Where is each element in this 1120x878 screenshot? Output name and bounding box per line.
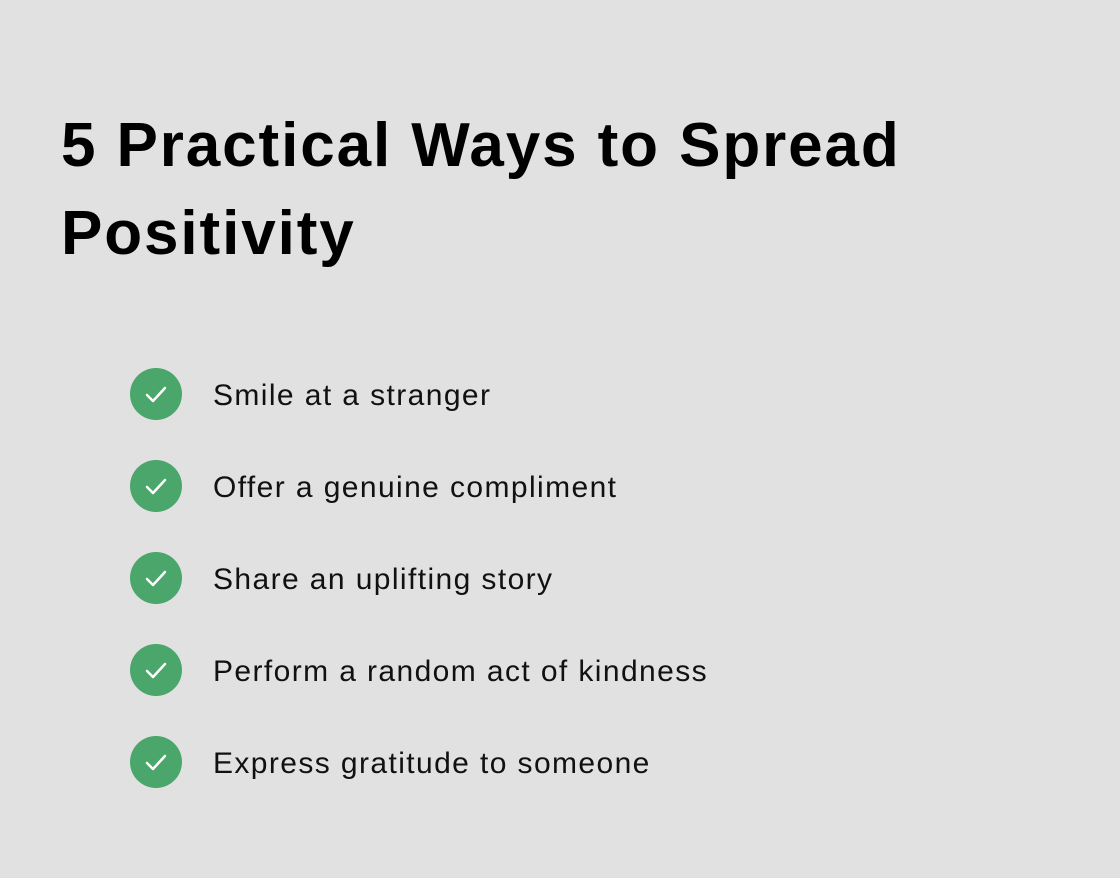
item: smile: Smile at a stranger	[213, 379, 491, 412]
icon: check	[130, 644, 182, 696]
item: compliment	[130, 460, 617, 512]
item: kindness: Perform a random act of kindness	[213, 655, 708, 688]
item: kindness	[130, 644, 708, 696]
item: smile	[130, 368, 491, 420]
icon: check	[130, 368, 182, 420]
item: gratitude: Express gratitude to someone	[213, 747, 651, 780]
title	[61, 111, 901, 268]
icon: check	[130, 460, 182, 512]
icon: check	[130, 552, 182, 604]
item: compliment: Offer a genuine compliment	[213, 471, 617, 504]
icon: check	[130, 736, 182, 788]
item: story: Share an uplifting story	[213, 563, 553, 596]
item: story	[130, 552, 553, 604]
title: 5 Practical Ways to Spread	[61, 111, 901, 180]
title: Positivity	[61, 199, 356, 268]
item: gratitude	[130, 736, 651, 788]
